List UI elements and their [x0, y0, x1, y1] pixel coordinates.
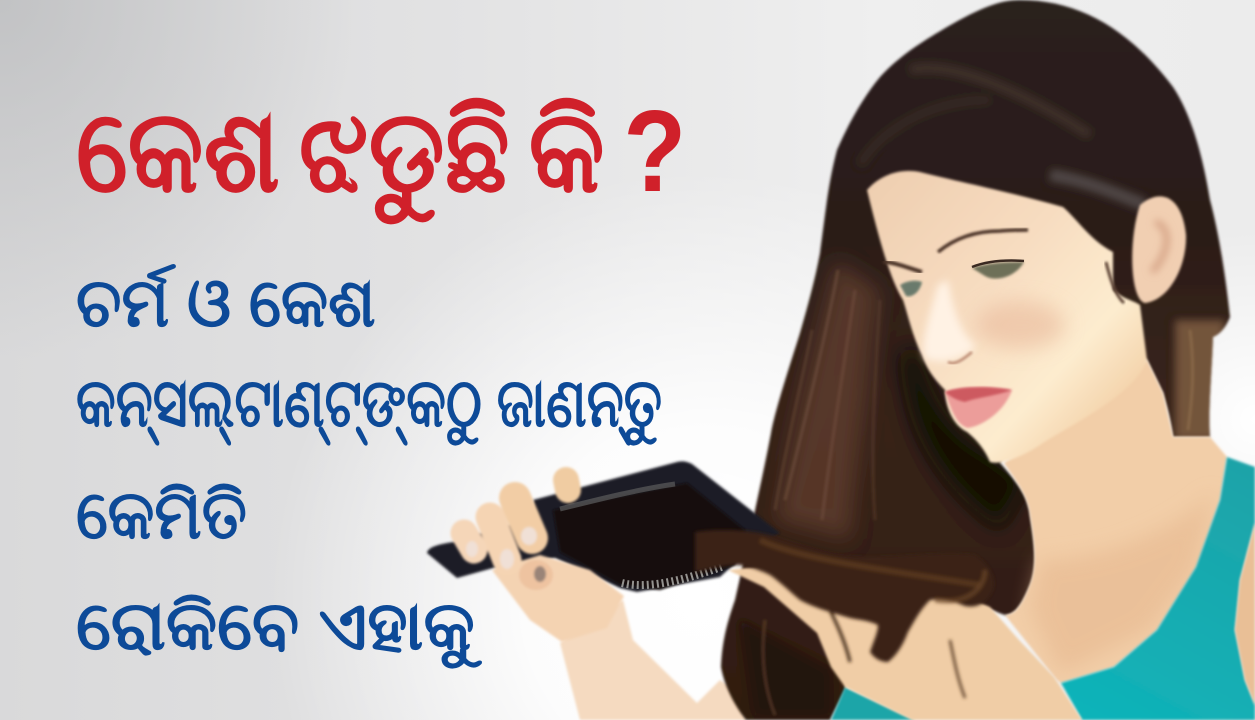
lips: [945, 387, 1012, 428]
ear: [1132, 196, 1186, 303]
subtitle line 2: କନ୍‌ସଲ୍‌ଟାଣ୍ଟ୍‌ଙ୍କଠୁ ଜାଣନ୍ତୁ: [76, 365, 662, 441]
lock of hair pulled through the brush: [695, 530, 994, 698]
eyebrows: [938, 230, 1028, 252]
chest shading: [1030, 490, 1215, 675]
raised forearm: [560, 600, 746, 720]
eyes: [972, 262, 1024, 279]
hair mass: [721, 0, 1230, 720]
right arm skin: [1235, 523, 1255, 705]
hair highlights and shading, clipped to the hair: [740, 68, 1225, 715]
hand on hair: [728, 560, 1082, 720]
subtitle line 3: କେମିତି: [76, 477, 247, 553]
cheek blush: [975, 301, 1065, 349]
subtitle line 1: ଚର୍ମ ଓ କେଶ: [76, 265, 376, 341]
sideburn: [1106, 262, 1124, 303]
subtitle line 4: ରୋକିବେ ଏହାକୁ: [76, 588, 475, 664]
teal top: [831, 457, 1255, 720]
face: [867, 171, 1186, 463]
title: କେଶ ଝଡୁଛି କି ?: [76, 86, 686, 216]
neck and chest: [1004, 360, 1227, 683]
hairbrush: [427, 461, 780, 592]
fingers and palm: [464, 480, 624, 642]
nose highlight: [923, 280, 975, 361]
